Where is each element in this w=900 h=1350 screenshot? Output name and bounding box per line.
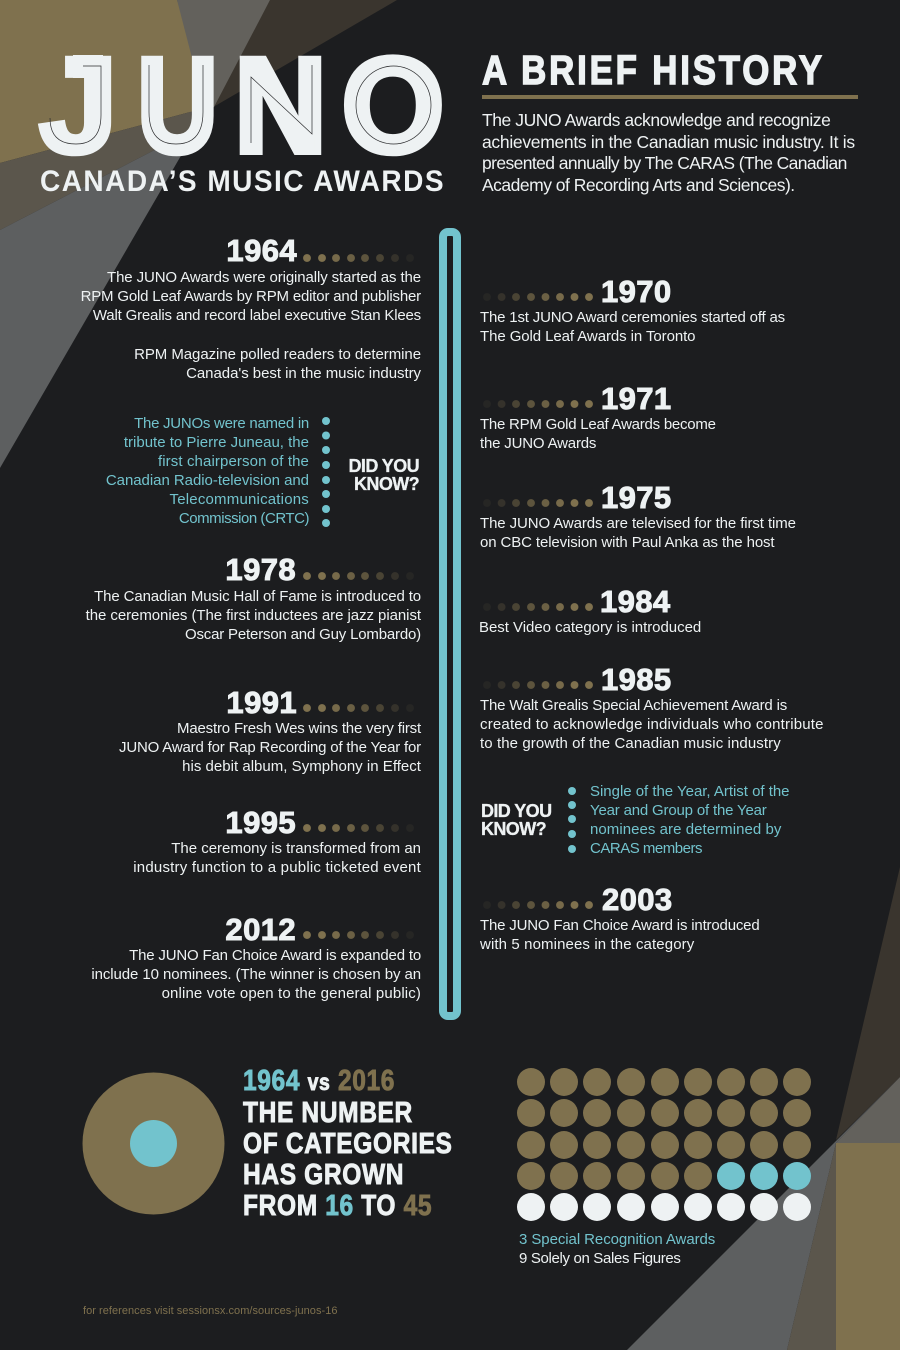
- text: [480, 309, 785, 345]
- text: the JUNO Awards: [480, 435, 596, 452]
- text: Telecommunications: [170, 491, 309, 508]
- chart: dot grid of 45 categories: [517, 1068, 811, 1221]
- event: 1975: [480, 480, 796, 551]
- event: 1995: [133, 805, 421, 876]
- text: online vote open to the general public): [162, 985, 421, 1002]
- year: 1984: 1984: [600, 584, 671, 619]
- event: 1970: [480, 274, 785, 345]
- legend: [519, 1231, 715, 1267]
- text: [86, 588, 421, 643]
- intro text: [482, 110, 855, 195]
- text: The RPM Gold Leaf Awards become: [480, 416, 716, 433]
- dots: [303, 930, 417, 940]
- text: tribute to Pierre Juneau, the: [124, 434, 309, 451]
- text: The JUNO Fan Choice Award is introduced: [480, 917, 760, 934]
- intro text: Academy of Recording Arts and Sciences).: [482, 175, 795, 195]
- text: The JUNOs were named in: [134, 415, 309, 432]
- heading: number of categories: [242, 1065, 453, 1222]
- year: 1985: 1985: [601, 662, 672, 697]
- intro text: achievements in the Canadian music industry. It is: [482, 132, 855, 152]
- heading: number of categories: 1964 vs 2016: [243, 1065, 395, 1097]
- footer references: for references visit sessionsx.com/sources-junos-16: [83, 1305, 338, 1317]
- text: industry function to a public ticketed event: [133, 859, 421, 876]
- event: 1985: [480, 662, 824, 752]
- text: The JUNO Awards are televised for the first time: [480, 515, 796, 532]
- year: 1971: 1971: [601, 381, 672, 416]
- text: Walt Grealis and record label executive Stan Klees: [93, 307, 421, 324]
- legend: 9 Solely on Sales Figures: [519, 1250, 681, 1267]
- heading: number of categories: HAS GROWN: [243, 1159, 404, 1191]
- text: The Gold Leaf Awards in Toronto: [480, 328, 695, 345]
- dots: [483, 292, 597, 302]
- event: 1971: [480, 381, 716, 452]
- did you know label: KNOW?: [354, 474, 419, 494]
- text: JUNO Award for Rap Recording of the Year for: [119, 739, 421, 756]
- did you know label: DID YOU: [481, 801, 551, 821]
- text: Oscar Peterson and Guy Lombardo): [185, 626, 421, 643]
- text: Commission (CRTC): [179, 510, 309, 527]
- year: 1995: 1995: [225, 805, 296, 840]
- did you know label: [349, 456, 419, 494]
- text: [480, 515, 796, 551]
- dots: [483, 602, 597, 612]
- text: The 1st JUNO Award ceremonies started off as: [480, 309, 785, 326]
- chart: 16 vs 45 proportional circles: [82, 1072, 224, 1214]
- text: [81, 269, 421, 324]
- text: include 10 nominees. (The winner is chosen by an: [91, 966, 421, 983]
- text: The JUNO Fan Choice Award is expanded to: [129, 947, 421, 964]
- text: [119, 720, 422, 775]
- text: Single of the Year, Artist of the: [590, 783, 789, 800]
- text: Canadian Radio-television and: [106, 472, 309, 489]
- text: The JUNO Awards were originally started as the: [107, 269, 421, 286]
- year: 1975: 1975: [601, 480, 672, 515]
- text: the ceremonies (The first inductees are jazz pianist: [86, 607, 421, 624]
- dots: [303, 253, 417, 263]
- text: Maestro Fresh Wes wins the very first: [177, 720, 421, 737]
- subtitle: CANADA’S MUSIC AWARDS: [40, 165, 445, 198]
- heading: a brief history: A BRIEF HISTORY: [482, 47, 825, 93]
- text: nominees are determined by: [590, 821, 781, 838]
- text: with 5 nominees in the category: [480, 936, 694, 953]
- title: JUNO: [38, 45, 444, 165]
- event: 2012: [91, 912, 421, 1002]
- event: 1978: [86, 552, 421, 643]
- dots: [483, 900, 597, 910]
- text: Year and Group of the Year: [590, 802, 767, 819]
- did you know label: [481, 801, 552, 839]
- year: 1964: 1964: [226, 233, 297, 268]
- text: The Walt Grealis Special Achievement Award is: [480, 697, 787, 714]
- intro text: The JUNO Awards acknowledge and recognize: [482, 110, 830, 130]
- dots: [303, 571, 417, 581]
- text: rpm poll: RPM Magazine polled readers to determine: [134, 346, 421, 363]
- text: first chairperson of the: [158, 453, 309, 470]
- bullet dots: [568, 787, 576, 853]
- text: to the growth of the Canadian music industry: [480, 735, 781, 752]
- text: [590, 783, 789, 857]
- dots: [483, 399, 597, 409]
- year: 1970: 1970: [601, 274, 672, 309]
- event: 2003: [480, 882, 760, 953]
- heading: number of categories: OF CATEGORIES: [243, 1128, 453, 1160]
- text: created to acknowledge individuals who contribute: [480, 716, 824, 733]
- text: RPM Gold Leaf Awards by RPM editor and publisher: [81, 288, 421, 305]
- bullet dots: [322, 417, 330, 527]
- did you know label: KNOW?: [481, 819, 546, 839]
- event: 1964: [81, 233, 421, 382]
- text: rpm poll: [134, 346, 421, 382]
- dots: [303, 703, 417, 713]
- year: 2003: 2003: [602, 882, 673, 917]
- did you know: right: [481, 783, 789, 857]
- text: Best Video category is introduced: [479, 619, 701, 636]
- text: The ceremony is transformed from an: [171, 840, 421, 857]
- year: 2012: 2012: [225, 912, 296, 947]
- text: [133, 840, 421, 876]
- text: [480, 917, 760, 953]
- text: [480, 697, 824, 752]
- text: CARAS members: [590, 840, 702, 857]
- dots: [303, 823, 417, 833]
- text: The Canadian Music Hall of Fame is introduced to: [94, 588, 421, 605]
- timeline bar: [439, 228, 461, 1020]
- did you know: left: [106, 415, 419, 527]
- year: 1991: 1991: [226, 685, 297, 720]
- text: on CBC television with Paul Anka as the host: [480, 534, 774, 551]
- heading: number of categories: FROM 16 TO 45: [243, 1190, 432, 1222]
- heading rule: [482, 95, 858, 99]
- dots: [483, 498, 597, 508]
- event: 1984: [479, 584, 701, 636]
- dots: [483, 680, 597, 690]
- event: 1991: [119, 685, 422, 775]
- year: 1978: 1978: [225, 552, 296, 587]
- text: his debit album, Symphony in Effect: [182, 758, 421, 775]
- text: rpm poll: Canada's best in the music industry: [186, 365, 421, 382]
- text: [91, 947, 421, 1002]
- did you know label: DID YOU: [349, 456, 419, 476]
- legend: 3 Special Recognition Awards: [519, 1231, 715, 1248]
- heading: number of categories: THE NUMBER: [243, 1097, 413, 1129]
- text: [480, 416, 716, 452]
- text: [106, 415, 309, 527]
- intro text: presented annually by The CARAS (The Canadian: [482, 153, 847, 173]
